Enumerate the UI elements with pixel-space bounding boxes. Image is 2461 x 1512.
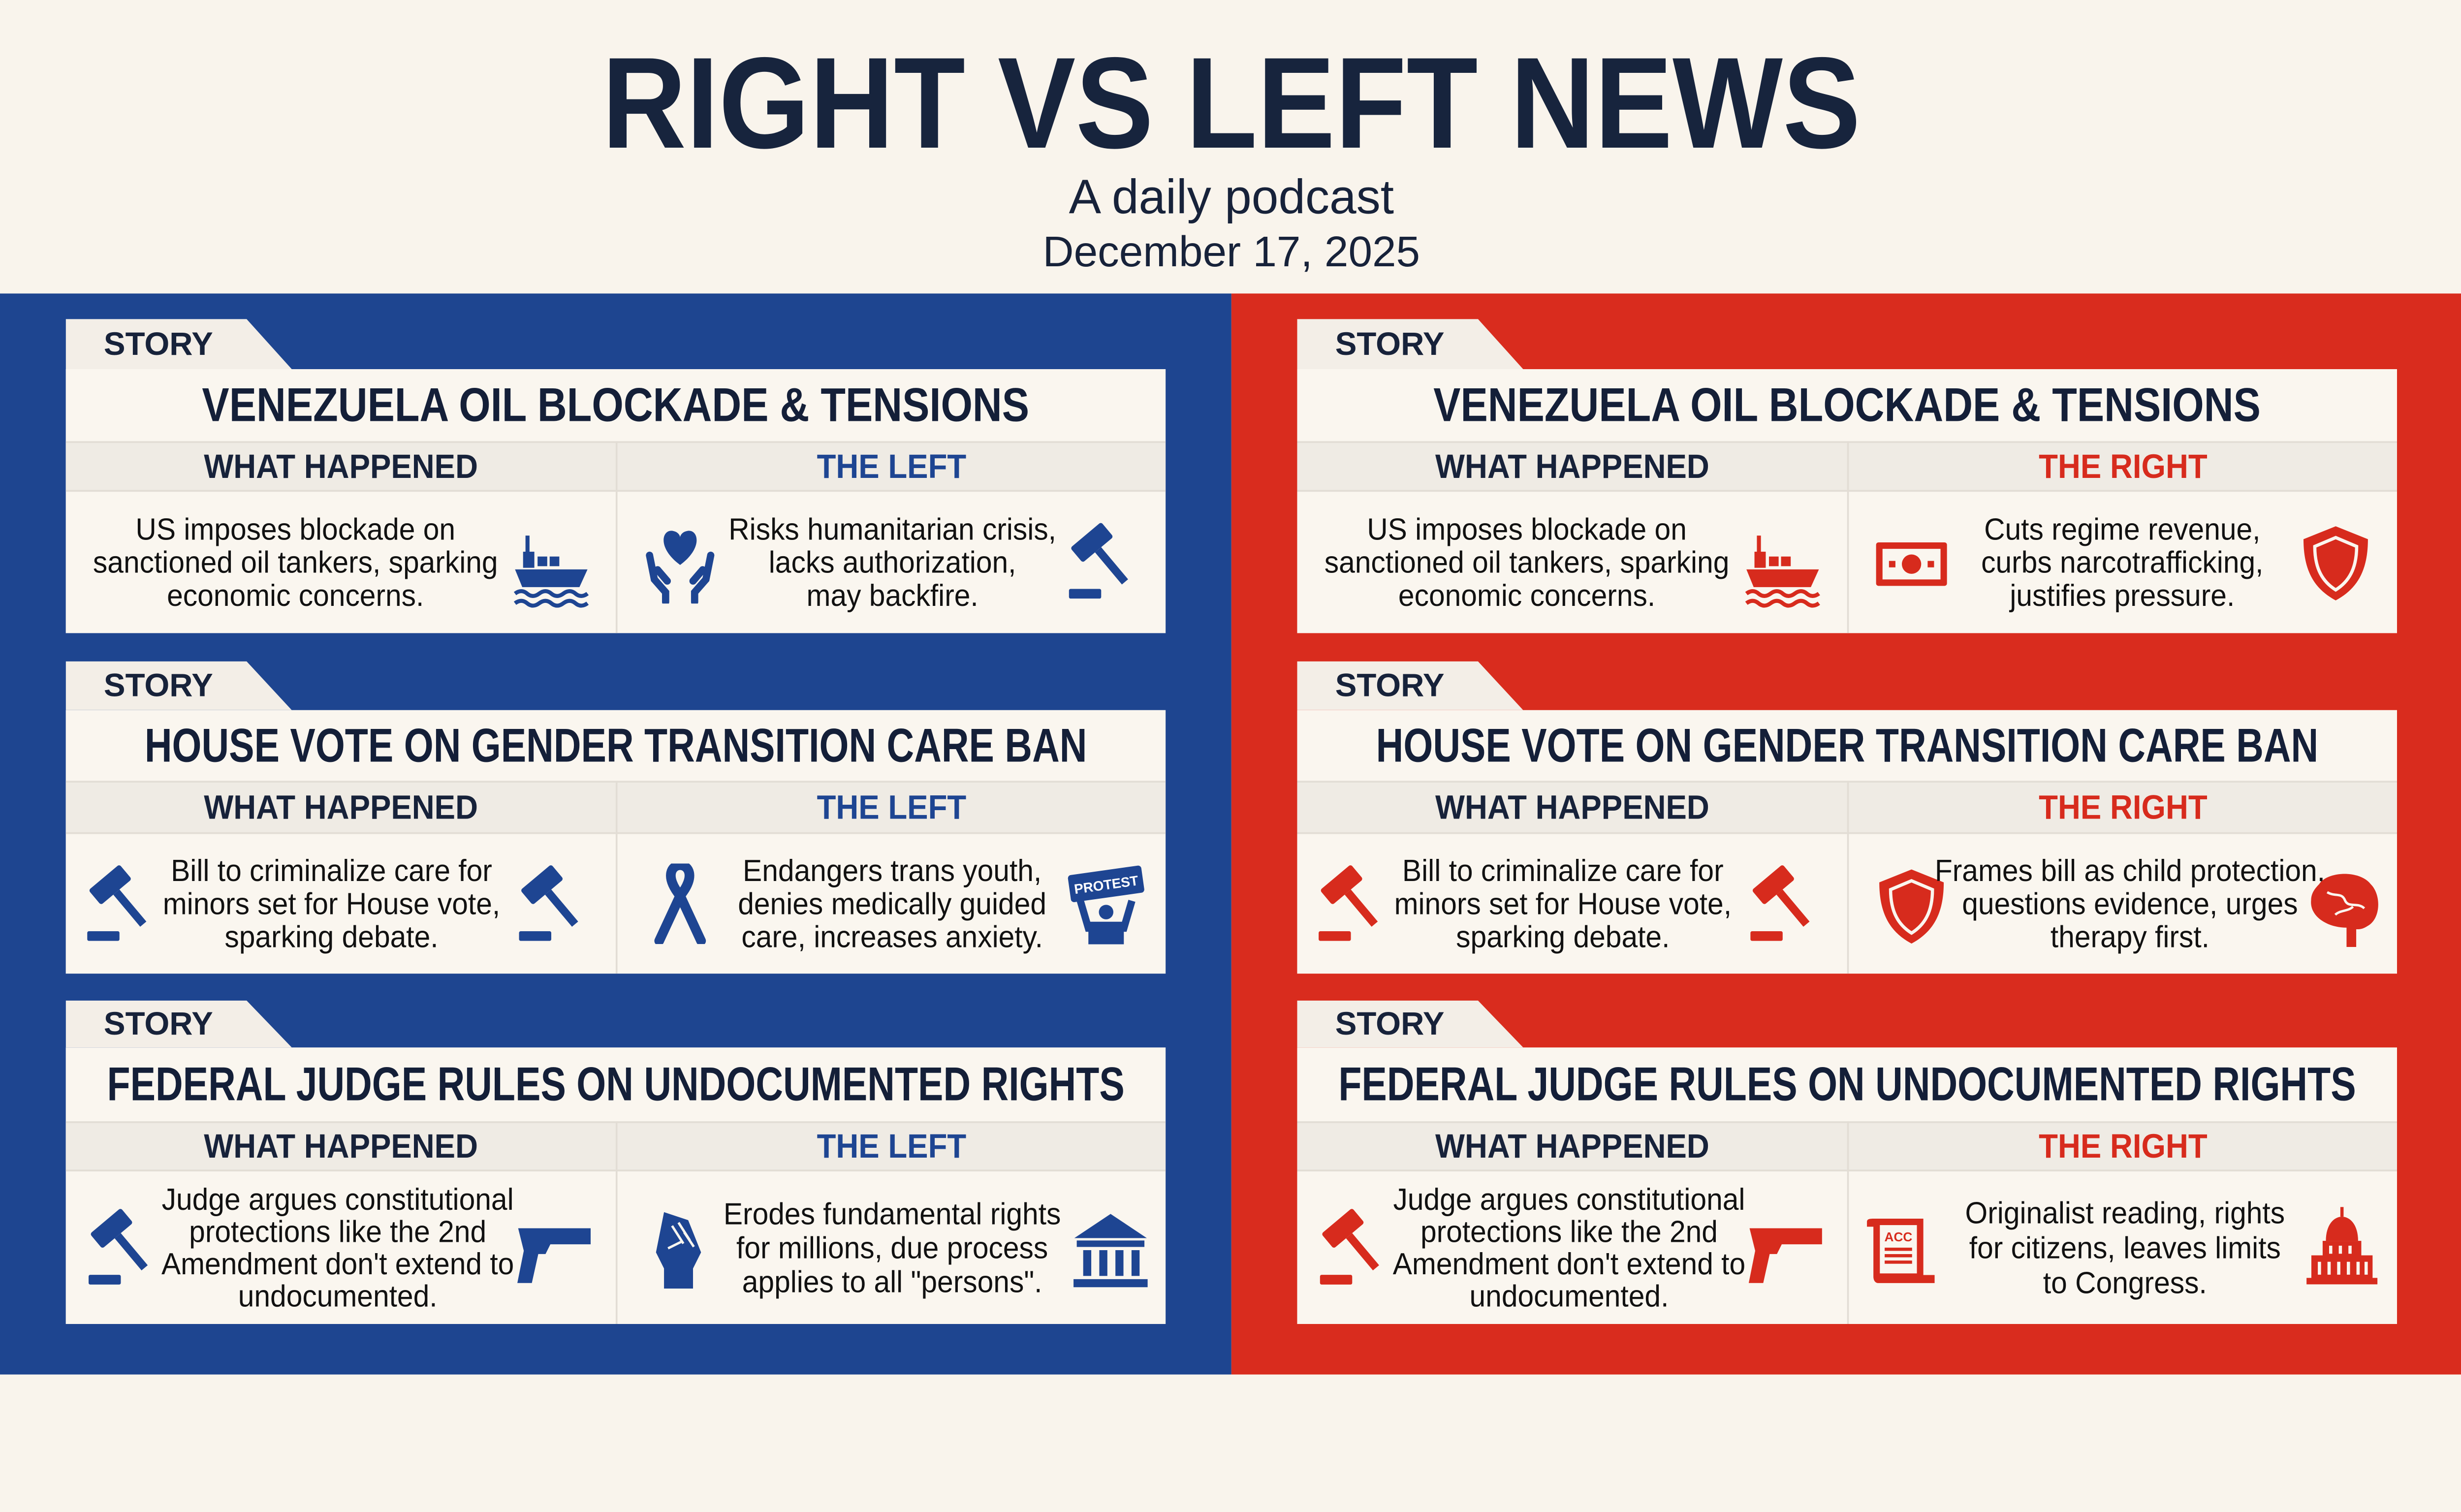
text: justifies pressure.: [2010, 578, 2235, 613]
text: [646, 834, 1138, 974]
header: what happened: WHAT HAPPENED: [204, 788, 478, 826]
text: [646, 492, 1138, 633]
icon: gun: [1745, 1208, 1826, 1289]
cell: the right: [1847, 834, 2397, 974]
header: what happened: WHAT HAPPENED: [204, 447, 478, 485]
header: the right: THE RIGHT: [2039, 447, 2207, 485]
text: [92, 1171, 584, 1324]
cell: what happened: [93, 512, 589, 613]
icon: heart hands: [646, 531, 715, 603]
icon: brain: [2303, 868, 2384, 948]
header: what happened: [1297, 781, 1847, 834]
story title: FEDERAL JUDGE RULES ON UNDOCUMENTED RIGHTS: [1338, 1058, 2356, 1110]
cell: what happened: [66, 834, 616, 974]
text: Risks humanitarian crisis,: [728, 512, 1056, 546]
cell: the right: [1847, 492, 2397, 633]
text: lacks authorization,: [768, 545, 1016, 579]
tab: STORY: [104, 326, 213, 362]
text: Amendment don't extend to: [161, 1247, 514, 1281]
text: [1884, 834, 2376, 974]
header: what happened: [1297, 1121, 1847, 1171]
story title: HOUSE VOTE ON GENDER TRANSITION CARE BAN: [1376, 719, 2318, 772]
header: what happened: [66, 781, 616, 834]
text: undocumented.: [238, 1279, 438, 1313]
tab: STORY: [104, 667, 213, 703]
text: undocumented.: [1470, 1279, 1669, 1313]
cell: the left: [616, 834, 1166, 974]
text: Bill to criminalize care for: [1402, 854, 1724, 888]
header: the right: [1847, 1121, 2397, 1171]
date: December 17, 2025: [1043, 228, 1420, 276]
tab: STORY: [1335, 326, 1445, 362]
header: the left: [616, 441, 1166, 492]
text: sparking debate.: [1456, 920, 1670, 954]
text: protections like the 2nd: [1420, 1215, 1718, 1249]
tab: [66, 1001, 292, 1047]
text: economic concerns.: [1398, 578, 1655, 613]
icon: shield: [2296, 523, 2376, 603]
text: [1281, 492, 1773, 633]
cell: what happened: [66, 1171, 616, 1324]
icon: scroll: [1861, 1209, 1941, 1290]
header: what happened: [66, 441, 616, 492]
text: protections like the 2nd: [189, 1215, 486, 1249]
tab: STORY: [1335, 667, 1445, 703]
cell: what happened: [1297, 834, 1847, 974]
card: [66, 710, 1166, 974]
story title: VENEZUELA OIL BLOCKADE & TENSIONS: [1433, 378, 2261, 431]
header: the left: THE LEFT: [817, 447, 966, 485]
panel: right (red): [1231, 293, 2461, 1375]
header: what happened: WHAT HAPPENED: [204, 1127, 478, 1165]
text: [646, 1171, 1138, 1324]
text: sanctioned oil tankers, sparking: [93, 545, 498, 579]
icon: gavel: [1311, 864, 1391, 944]
story 1 left: [66, 319, 1166, 633]
text: Cuts regime revenue,: [1984, 512, 2261, 546]
story 3 right: [1297, 1000, 2397, 1324]
tab: STORY: [104, 1006, 213, 1041]
icon: ribbon: [640, 864, 721, 944]
text: applies to all "persons".: [742, 1265, 1042, 1299]
header: the left: [616, 1121, 1166, 1171]
card: [1297, 369, 2397, 633]
text: minors set for House vote,: [1394, 887, 1732, 921]
text: therapy first.: [2051, 920, 2209, 954]
header: the left: THE LEFT: [817, 788, 966, 826]
text: [93, 512, 498, 613]
card: [1297, 1047, 2397, 1324]
story 2 left: [66, 662, 1166, 974]
text: Amendment don't extend to: [1393, 1247, 1745, 1281]
text: denies medically guided: [738, 887, 1046, 921]
text: for citizens, leaves limits: [1969, 1230, 2281, 1265]
header: what happened: WHAT HAPPENED: [1435, 788, 1709, 826]
tab: [1297, 662, 1523, 710]
story title: FEDERAL JUDGE RULES ON UNDOCUMENTED RIGHTS: [107, 1058, 1125, 1110]
header: the right: THE RIGHT: [2039, 788, 2207, 826]
text: Endangers trans youth,: [743, 854, 1041, 888]
header: what happened: WHAT HAPPENED: [1435, 1127, 1709, 1165]
tab: [66, 662, 292, 710]
text: sanctioned oil tankers, sparking: [1324, 545, 1729, 579]
title: RIGHT VS LEFT NEWS: [602, 31, 1861, 175]
text: sparking debate.: [225, 920, 439, 954]
text: may backfire.: [806, 578, 978, 613]
text: US imposes blockade on: [1367, 512, 1687, 546]
story title: HOUSE VOTE ON GENDER TRANSITION CARE BAN: [145, 719, 1087, 772]
text: US imposes blockade on: [135, 512, 455, 546]
icon: money: [1871, 523, 1952, 603]
tab: [66, 319, 292, 369]
card: [66, 369, 1166, 633]
text: curbs narcotrafficking,: [1981, 545, 2264, 579]
story 3 left: [66, 1000, 1166, 1324]
icon: gavel: [79, 864, 160, 944]
cell: the left: [616, 1171, 1166, 1324]
icon: gavel: [81, 1207, 161, 1288]
header: the left: THE LEFT: [817, 1127, 966, 1165]
card: [66, 1047, 1166, 1324]
header: the right: THE RIGHT: [2039, 1127, 2207, 1165]
header: what happened: [66, 1121, 616, 1171]
text: questions evidence, urges: [1962, 887, 2298, 921]
text: [1317, 834, 1809, 974]
text: Originalist reading, rights: [1965, 1196, 2285, 1230]
text: economic concerns.: [167, 578, 424, 613]
icon: shield: [1871, 866, 1952, 947]
icon: ship: [514, 536, 589, 608]
text: for millions, due process: [736, 1230, 1048, 1265]
tab: [1297, 1001, 1523, 1047]
story 1 right: [1297, 319, 2397, 633]
text: Judge argues constitutional: [162, 1182, 514, 1216]
text: Erodes fundamental rights: [724, 1197, 1061, 1230]
header: the right: [1847, 441, 2397, 492]
header: what happened: [1297, 441, 1847, 492]
text: [1323, 1171, 1815, 1324]
text: [86, 834, 578, 974]
header: what happened: WHAT HAPPENED: [1435, 447, 1709, 485]
tab: STORY: [1335, 1006, 1445, 1041]
card: [1297, 710, 2397, 974]
icon: capitol: [2302, 1205, 2382, 1286]
story title: VENEZUELA OIL BLOCKADE & TENSIONS: [202, 378, 1029, 431]
panel: left (blue): [0, 293, 1231, 1375]
text: [1879, 1171, 2371, 1324]
tab: [1297, 319, 1523, 369]
text: care, increases anxiety.: [741, 920, 1043, 954]
icon: fist: [640, 1208, 721, 1289]
icon: courthouse: [1071, 1210, 1151, 1291]
icon: gavel: [1061, 521, 1141, 602]
icon: gavel: [1742, 864, 1823, 944]
text: Frames bill as child protection,: [1935, 854, 2325, 888]
cell: the left: [616, 492, 1166, 633]
text: [1876, 492, 2368, 633]
text: minors set for House vote,: [163, 887, 500, 921]
header: the left: [616, 781, 1166, 834]
icon: gavel: [1312, 1207, 1392, 1288]
story 2 right: [1297, 662, 2397, 974]
icon: gavel: [511, 864, 592, 944]
cell: the right: [1847, 1171, 2397, 1324]
header: the right: [1847, 781, 2397, 834]
cell: what happened: [1297, 492, 1847, 633]
text: Bill to criminalize care for: [171, 854, 492, 888]
text: Judge argues constitutional: [1393, 1182, 1745, 1216]
subtitle: A daily podcast: [1069, 170, 1394, 224]
icon: protest sign: [1066, 865, 1146, 946]
icon: ship: [1742, 528, 1823, 608]
cell: what happened: [1297, 1171, 1847, 1324]
icon: gun: [514, 1208, 595, 1289]
text: to Congress.: [2043, 1265, 2207, 1299]
